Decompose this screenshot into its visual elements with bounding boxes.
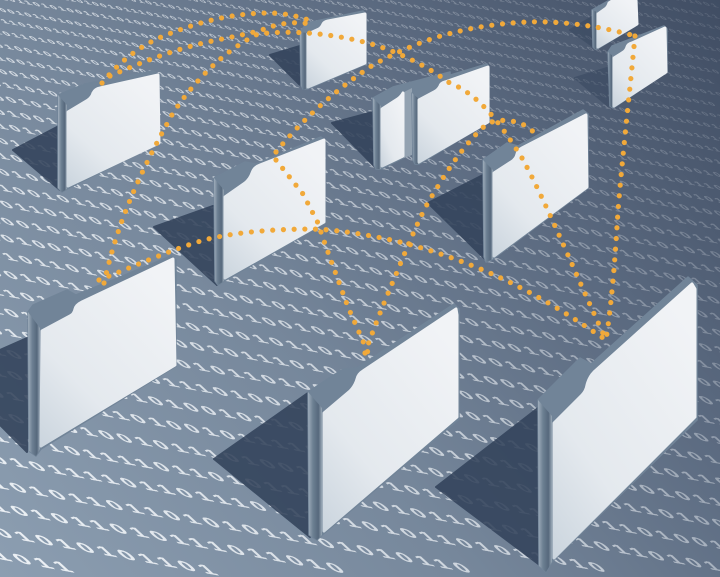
folder: centre pair, front folder	[412, 64, 489, 164]
folder: right middle	[428, 110, 588, 262]
folder: far top right	[570, 0, 637, 49]
connection: long arc from bottom left folder to bottom right folder	[104, 32, 606, 340]
folder: centre middle	[154, 137, 325, 285]
connection: upper arc from top left folder to top centre folder	[102, 13, 313, 83]
dotted network connections	[99, 13, 635, 355]
connection: top right folder down to bottom right folder	[606, 36, 635, 340]
connection: inner arc from top left folder to top centre folder	[110, 23, 310, 76]
folder: bottom left	[0, 256, 176, 456]
folder: top left	[13, 71, 159, 192]
connection: bottom left folder across to bottom right folder	[99, 229, 606, 340]
folder: centre pair, rear folder	[332, 72, 450, 169]
connection: centre folder to bottom centre folder	[276, 160, 369, 355]
connection: arc from centre folder to top right folder	[276, 22, 635, 152]
folder: bottom right	[436, 277, 697, 572]
folder: bottom centre	[214, 304, 459, 540]
connection: bottom centre folder up to right middle folder	[365, 120, 535, 353]
folder: top right	[575, 26, 667, 108]
folder: top centre	[270, 11, 366, 89]
